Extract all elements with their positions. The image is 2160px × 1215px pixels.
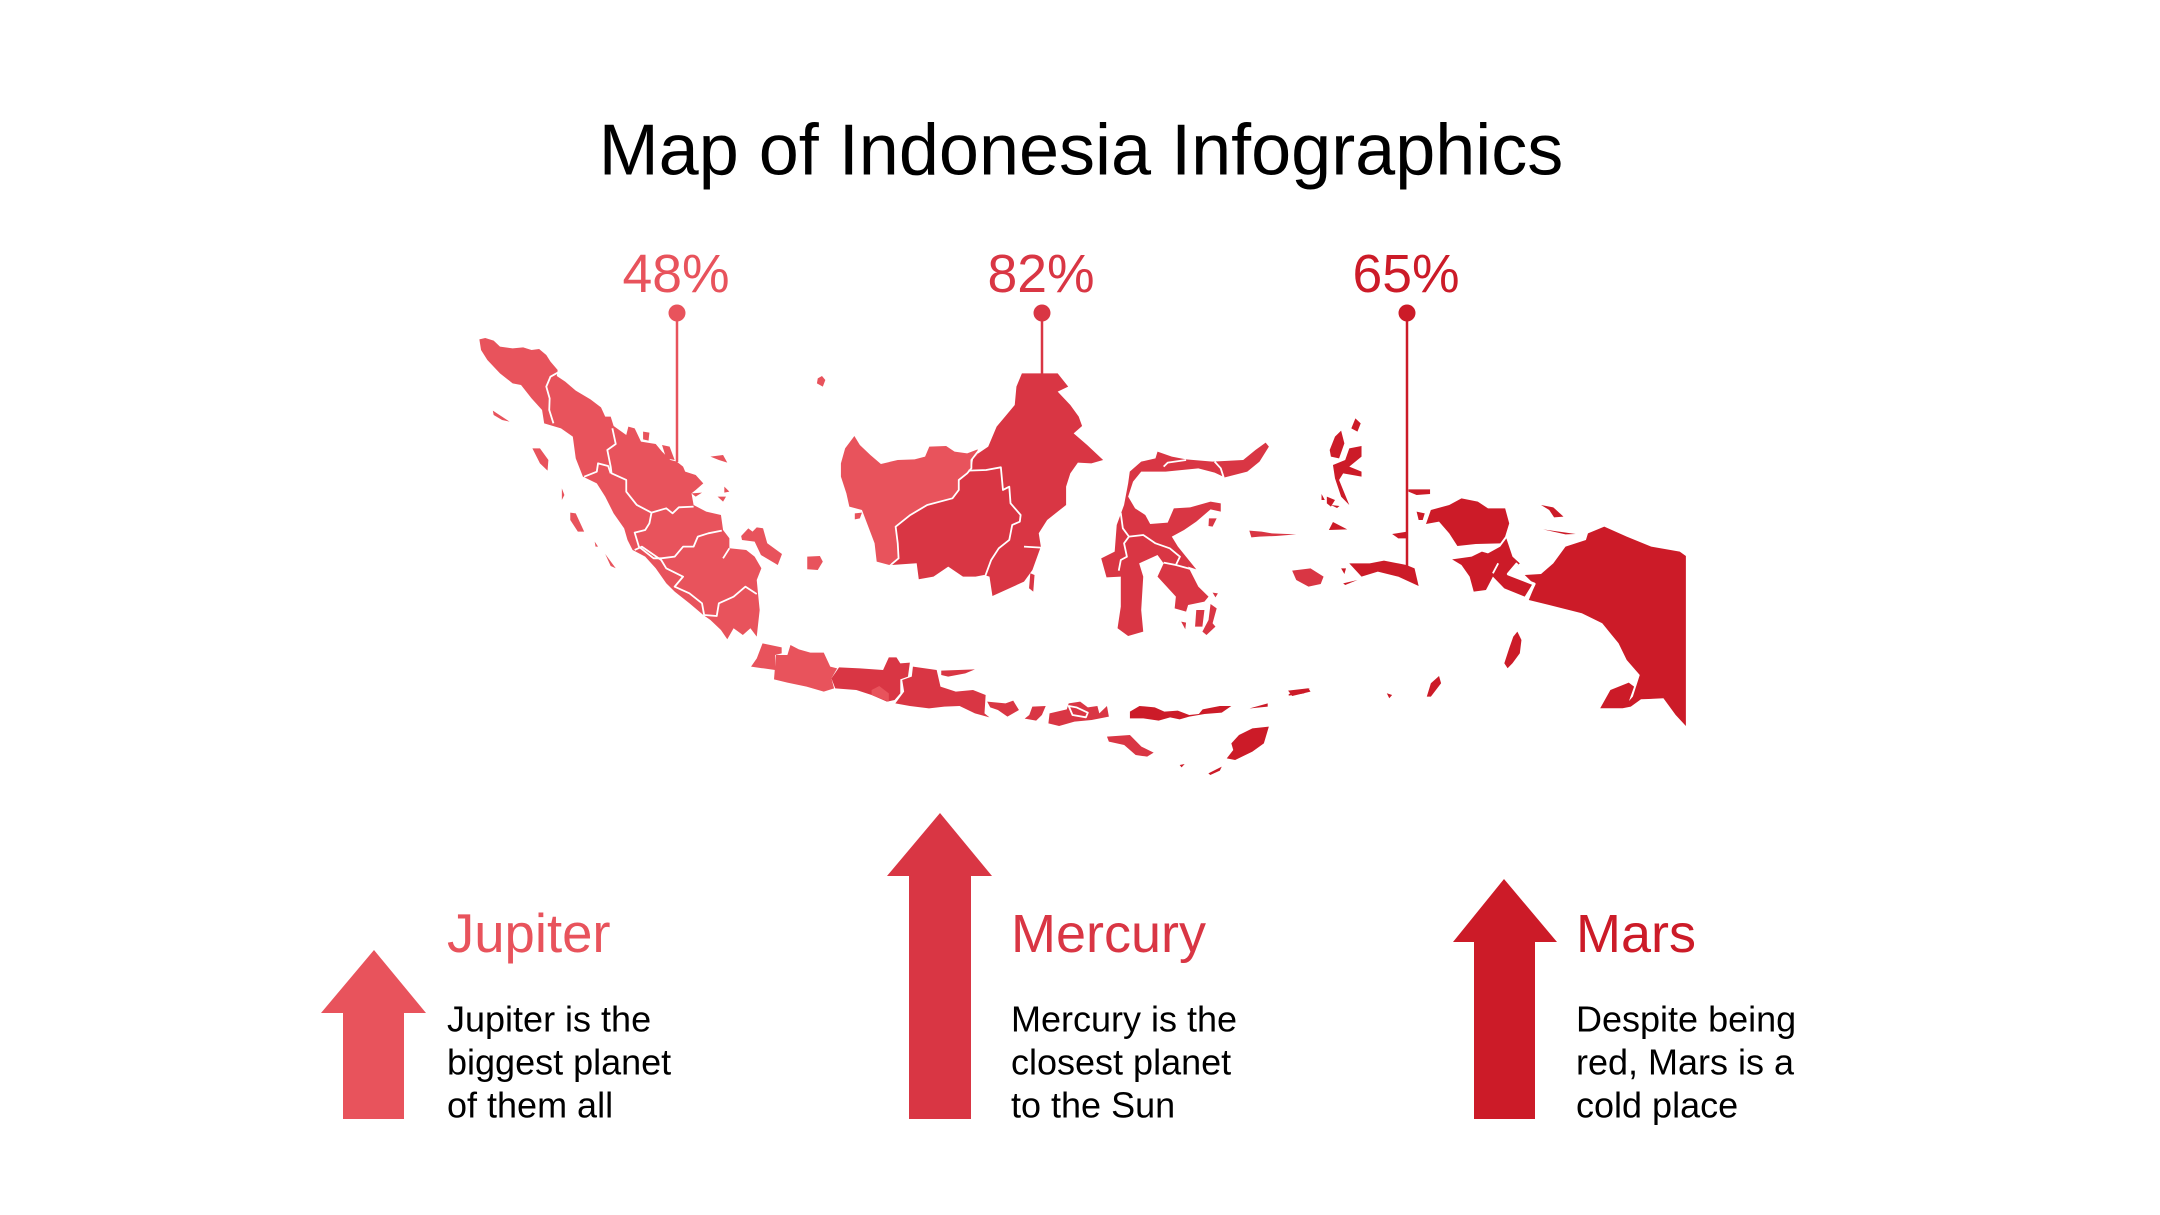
text block: Mercury: Mercury is the	[1011, 998, 1237, 1040]
icon: Mercury arrow	[887, 813, 992, 1119]
callout: 48%: 48%	[622, 245, 730, 304]
title: Map of Indonesia Infographics	[599, 110, 1563, 190]
sumatra province borders	[546, 373, 558, 423]
text block: Mars: Despite being	[1576, 998, 1796, 1040]
icon: Mars arrow	[1453, 879, 1557, 1119]
text block: Mercury: Mercury	[1011, 904, 1206, 964]
text block: Jupiter: Jupiter is the	[447, 998, 651, 1040]
text block: Jupiter: Jupiter	[447, 903, 611, 964]
text block: Mars: cold place	[1576, 1084, 1738, 1126]
callout: 48%	[622, 245, 730, 462]
callout: 65%	[1352, 245, 1460, 566]
text block: Mercury: closest planet	[1011, 1042, 1231, 1082]
text block: Mars	[1576, 904, 1796, 1126]
text block: Jupiter: biggest planet	[447, 1042, 671, 1082]
map: java and lesser sunda	[751, 643, 1310, 775]
map: western islands	[479, 338, 1103, 639]
icon: Jupiter arrow	[321, 950, 426, 1119]
map: sulawesi, maluku and papua	[1101, 418, 1686, 726]
kalimantan	[891, 373, 1103, 596]
text block: Mercury: to the Sun	[1011, 1084, 1175, 1126]
callout: 82%	[987, 245, 1095, 374]
map of Indonesia	[479, 338, 1686, 775]
text block: Jupiter	[447, 903, 671, 1126]
text block: Mars: red, Mars is a	[1576, 1042, 1795, 1082]
text block: Mercury	[1011, 904, 1237, 1126]
callout: 65%: 65%	[1352, 245, 1460, 304]
callout: 82%: 82%	[987, 245, 1095, 304]
text block: Mars: Mars	[1576, 904, 1696, 964]
text block: Jupiter: of them all	[447, 1084, 613, 1126]
